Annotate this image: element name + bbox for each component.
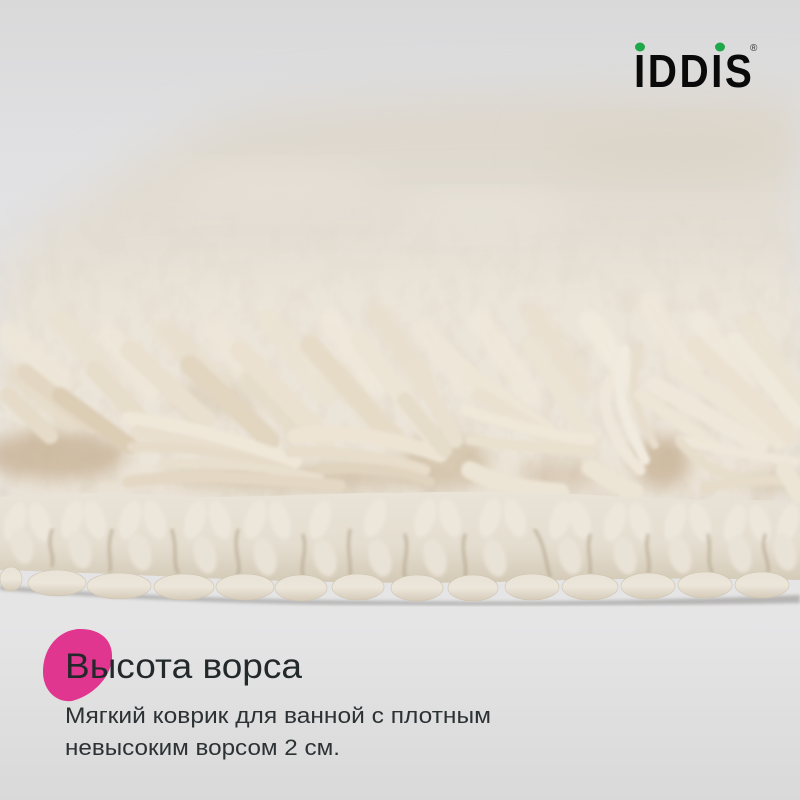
rug piping: shadow <box>0 585 800 605</box>
rug bound edge: braided band <box>0 492 800 583</box>
logo: IDDIS: ® <box>750 43 758 54</box>
pink accent blob <box>43 629 112 701</box>
description text: Мягкий коврик для ванной с плотным <box>65 703 491 728</box>
rug pile: left fringe tuft <box>8 340 440 486</box>
rug pile: right fringe tufts <box>405 340 800 495</box>
logo: IDDIS: IDDIS <box>634 47 752 98</box>
rug piping: stitched lumps <box>0 567 789 601</box>
heading: Высота ворса <box>65 647 303 686</box>
description text <box>65 703 491 760</box>
rug pile: soft out-of-focus surface <box>0 90 800 510</box>
rug pile: fibre texture <box>0 344 799 500</box>
description text: невысоким ворсом 2 см. <box>65 735 340 760</box>
rug pile: mid fibres <box>10 305 795 440</box>
rug pile: shadows between tufts <box>0 382 800 492</box>
